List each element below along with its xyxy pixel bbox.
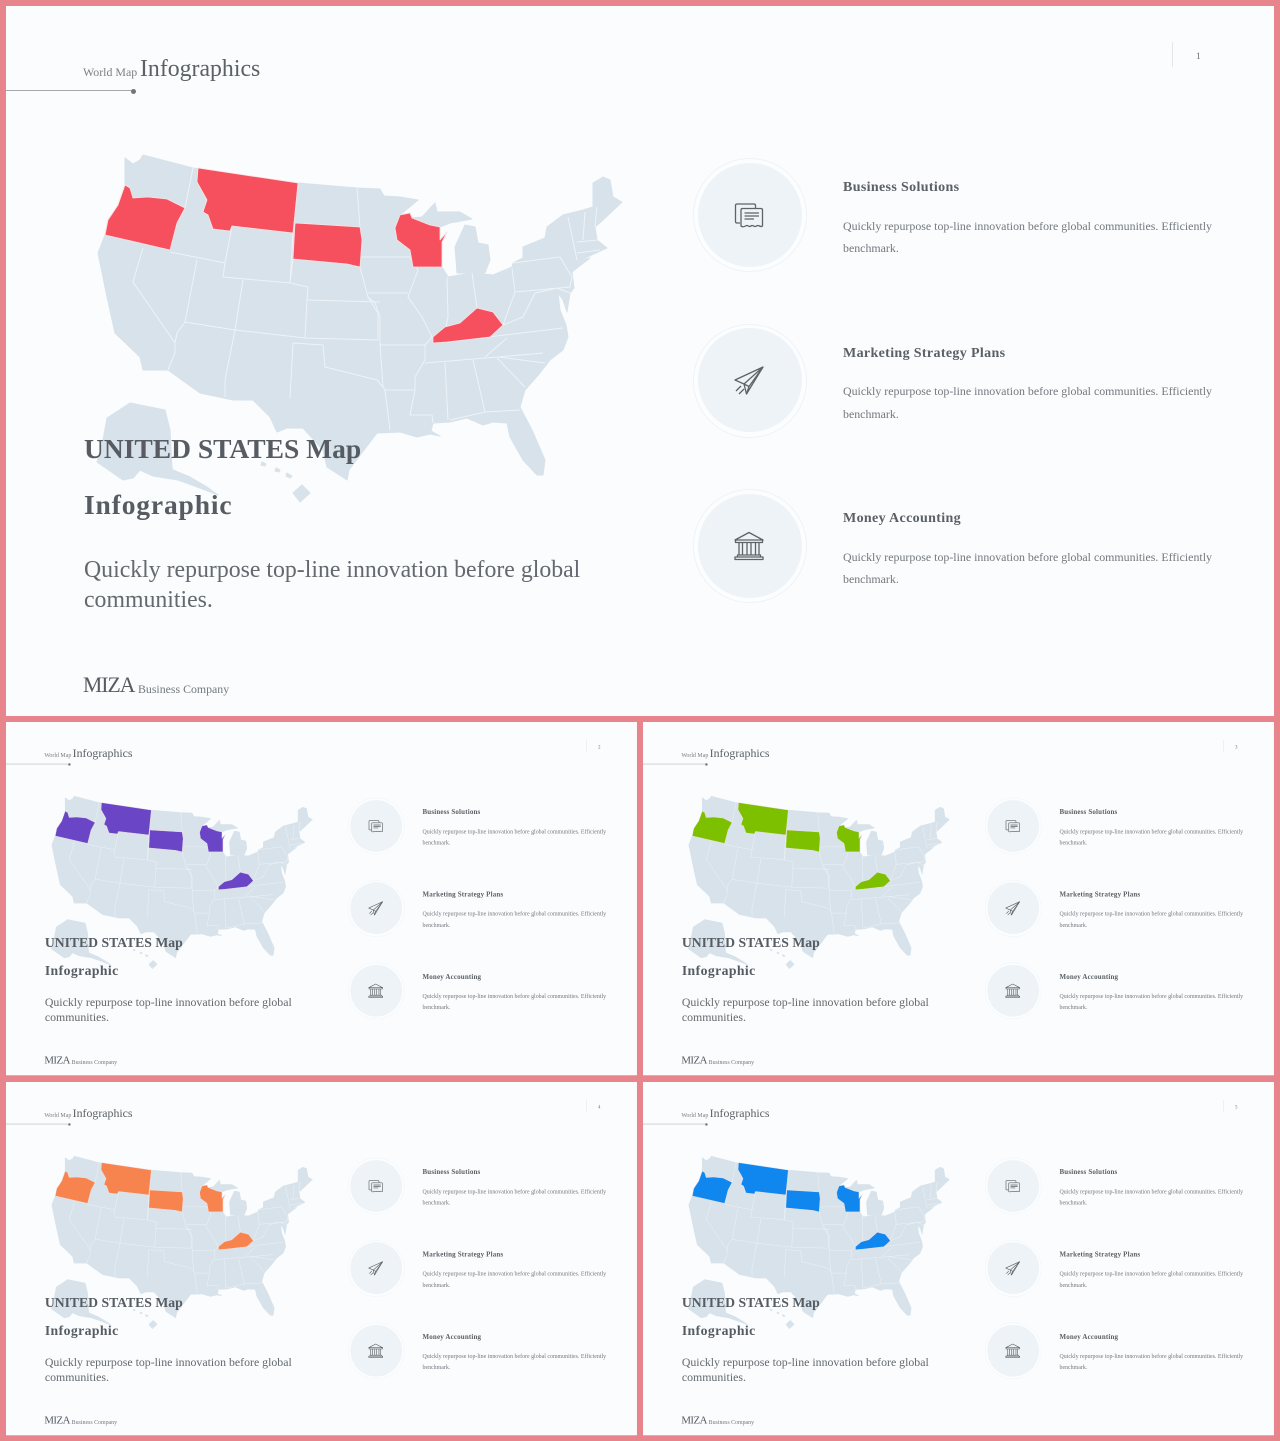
page number: 4 <box>598 1105 601 1110</box>
map: blue states <box>688 1156 950 1329</box>
item: Money Accounting <box>348 1322 606 1379</box>
item: Business Solutions <box>985 798 1243 854</box>
item: Money Accounting <box>693 489 1212 603</box>
item: Money Accounting: Quickly repurpose top-line innovation before global communities. Efficiently <box>422 1352 606 1359</box>
item: Marketing Strategy Plans: benchmark. <box>1059 921 1087 928</box>
subtitle text: Quickly repurpose top-line innovation before global <box>45 996 292 1009</box>
map: United States with highlighted states <box>96 154 622 502</box>
heading: UNITED STATES Map <box>682 934 820 950</box>
heading: Infographic <box>682 1322 756 1338</box>
heading: Infographic <box>45 1322 119 1338</box>
item: Business Solutions <box>348 798 606 854</box>
subtitle text <box>682 996 929 1024</box>
item: Marketing Strategy Plans: benchmark. <box>422 921 450 928</box>
item: Business Solutions: Business Solutions <box>1059 1169 1117 1176</box>
heading <box>45 1294 183 1338</box>
subtitle text: communities. <box>84 587 213 613</box>
map: green states <box>688 796 950 969</box>
slide 1: red main slide <box>6 6 1274 716</box>
header: World Map <box>681 1111 708 1118</box>
item: Marketing Strategy Plans: Marketing Strategy Plans <box>1059 891 1140 898</box>
heading <box>84 433 361 520</box>
logo: Business Company <box>72 1418 117 1425</box>
subtitle text: Quickly repurpose top-line innovation before global <box>682 996 929 1009</box>
page number: 1 <box>1196 52 1201 62</box>
item: Marketing Strategy Plans: benchmark. <box>1059 1281 1087 1288</box>
item: Business Solutions: benchmark. <box>422 1199 450 1206</box>
item: Marketing Strategy Plans <box>348 880 606 937</box>
slide 4: orange variant <box>6 1082 637 1435</box>
header: World Map <box>44 1111 71 1118</box>
logo: MIZA Business Company: Business Company <box>138 682 229 696</box>
item: Money Accounting: benchmark. <box>843 572 899 586</box>
heading <box>45 934 183 978</box>
item: Money Accounting: Quickly repurpose top-line innovation before global communities. Efficiently <box>422 992 606 999</box>
item: Money Accounting: Money Accounting <box>1059 1333 1118 1341</box>
item: Business Solutions: benchmark. <box>1059 1199 1087 1206</box>
page number: 2 <box>598 745 601 750</box>
item: Marketing Strategy Plans: Quickly repurpose top-line innovation before global communities. Efficiently <box>1059 910 1243 917</box>
heading: Infographic <box>84 489 232 520</box>
logo: MIZA <box>681 1414 707 1426</box>
header <box>643 747 770 766</box>
heading: UNITED STATES Map <box>45 934 183 950</box>
heading <box>682 1294 820 1338</box>
item: Marketing Strategy Plans: Quickly repurpose top-line innovation before global communities. Efficiently <box>1059 1270 1243 1277</box>
header: World Map Infographics <box>6 56 260 94</box>
logo <box>44 1054 117 1066</box>
header: World Map Infographics: Infographics <box>140 56 260 82</box>
header <box>6 1107 133 1126</box>
item: Business Solutions <box>693 158 1212 272</box>
heading <box>682 934 820 978</box>
item: Business Solutions: benchmark. <box>1059 839 1087 846</box>
item: Money Accounting: Money Accounting <box>1059 973 1118 981</box>
item: Marketing Strategy Plans: benchmark. <box>843 406 899 420</box>
item: Marketing Strategy Plans <box>985 880 1243 937</box>
item: Money Accounting: Money Accounting <box>843 511 961 526</box>
item: Business Solutions: Business Solutions <box>422 809 480 816</box>
map: purple states <box>51 796 312 969</box>
item: Money Accounting: Quickly repurpose top-line innovation before global communities. Efficiently <box>1059 992 1243 999</box>
subtitle text <box>45 1356 292 1384</box>
item: Business Solutions: Quickly repurpose top-line innovation before global communities. Efficiently <box>1059 1188 1243 1195</box>
heading: UNITED STATES Map <box>45 1294 183 1310</box>
item: Money Accounting <box>348 962 606 1019</box>
page number: 5 <box>1235 1105 1238 1110</box>
item: Business Solutions: benchmark. <box>843 241 899 255</box>
item: Business Solutions: Business Solutions <box>1059 809 1117 816</box>
item: Marketing Strategy Plans <box>348 1240 606 1297</box>
subtitle text: communities. <box>682 1011 746 1024</box>
item: Money Accounting: benchmark. <box>422 1004 450 1011</box>
item: Money Accounting: Quickly repurpose top-line innovation before global communities. Efficiently <box>843 550 1212 564</box>
item: Marketing Strategy Plans: Quickly repurpose top-line innovation before global communities. Efficiently <box>422 910 606 917</box>
item: Marketing Strategy Plans: Marketing Strategy Plans <box>422 891 503 898</box>
logo <box>681 1413 761 1427</box>
item: Business Solutions: Business Solutions <box>422 1169 480 1176</box>
subtitle text <box>45 996 292 1024</box>
item: Marketing Strategy Plans <box>983 1241 1252 1301</box>
item: Marketing Strategy Plans <box>693 324 1212 438</box>
item: Marketing Strategy Plans: Marketing Strategy Plans <box>422 1251 503 1258</box>
item: Business Solutions <box>348 1158 606 1214</box>
item: Marketing Strategy Plans: Quickly repurpose top-line innovation before global communities. Efficiently <box>422 1270 606 1277</box>
logo <box>681 1054 754 1066</box>
subtitle text: communities. <box>45 1371 109 1384</box>
logo: Business Company <box>709 1058 754 1065</box>
logo <box>44 1414 117 1426</box>
item: Marketing Strategy Plans: Marketing Strategy Plans <box>1059 1251 1140 1258</box>
subtitle text: Quickly repurpose top-line innovation before global <box>84 557 580 583</box>
header: World Map <box>681 751 708 758</box>
header: World Map <box>44 751 71 758</box>
heading: Infographic <box>682 962 756 978</box>
logo: MIZA <box>44 1054 70 1066</box>
subtitle text <box>84 557 580 613</box>
item: Business Solutions: Quickly repurpose top-line innovation before global communities. Efficiently <box>1059 828 1243 835</box>
item: Business Solutions <box>983 1159 1252 1218</box>
item: Business Solutions: Business Solutions <box>843 180 959 195</box>
slide 2: purple variant <box>6 722 637 1075</box>
item: Money Accounting: Money Accounting <box>422 1333 481 1341</box>
subtitle text: Quickly repurpose top-line innovation before global <box>45 1356 292 1369</box>
page number: 3 <box>1235 745 1238 750</box>
item: Money Accounting: Money Accounting <box>422 973 481 981</box>
logo: MIZA <box>681 1054 707 1066</box>
logo: MIZA Business Company: MIZA <box>83 673 134 697</box>
item: Money Accounting: benchmark. <box>422 1364 450 1371</box>
item: Money Accounting <box>983 1323 1252 1383</box>
item: Business Solutions: Quickly repurpose top-line innovation before global communities. Efficiently <box>843 218 1212 232</box>
slide 3: green variant <box>643 722 1274 1075</box>
subtitle text: Quickly repurpose top-line innovation before global <box>682 1356 929 1369</box>
item: Marketing Strategy Plans: Quickly repurpose top-line innovation before global communities. Efficiently <box>843 384 1212 398</box>
heading: UNITED STATES Map <box>84 433 361 464</box>
header: Infographics <box>73 747 133 760</box>
header: Infographics <box>710 1107 770 1120</box>
item: Money Accounting: benchmark. <box>1059 1004 1087 1011</box>
header <box>6 747 133 766</box>
item: Marketing Strategy Plans: benchmark. <box>422 1281 450 1288</box>
item: Money Accounting: benchmark. <box>1059 1364 1087 1371</box>
subtitle text <box>682 1355 936 1386</box>
header: Infographics <box>73 1107 133 1120</box>
logo: MIZA Business Company <box>83 673 230 697</box>
logo: Business Company <box>72 1058 117 1065</box>
map: orange states <box>51 1156 312 1329</box>
logo: Business Company <box>709 1418 754 1425</box>
logo: MIZA <box>44 1414 70 1426</box>
item: Business Solutions: Quickly repurpose top-line innovation before global communities. Efficiently <box>422 1188 606 1195</box>
item: Money Accounting: Quickly repurpose top-line innovation before global communities. Efficiently <box>1059 1352 1243 1359</box>
heading: UNITED STATES Map <box>682 1294 820 1310</box>
item: Business Solutions: benchmark. <box>422 839 450 846</box>
item: Marketing Strategy Plans: Marketing Strategy Plans <box>843 346 1005 360</box>
subtitle text: communities. <box>682 1371 746 1384</box>
item: Business Solutions: Quickly repurpose top-line innovation before global communities. Efficiently <box>422 828 606 835</box>
slide 5: blue variant <box>643 1082 1274 1435</box>
subtitle text: communities. <box>45 1011 109 1024</box>
header: Infographics <box>710 747 770 760</box>
item: Money Accounting <box>985 962 1243 1019</box>
heading: Infographic <box>45 962 119 978</box>
header: World Map Infographics: World Map <box>83 65 137 79</box>
header <box>643 1107 770 1126</box>
